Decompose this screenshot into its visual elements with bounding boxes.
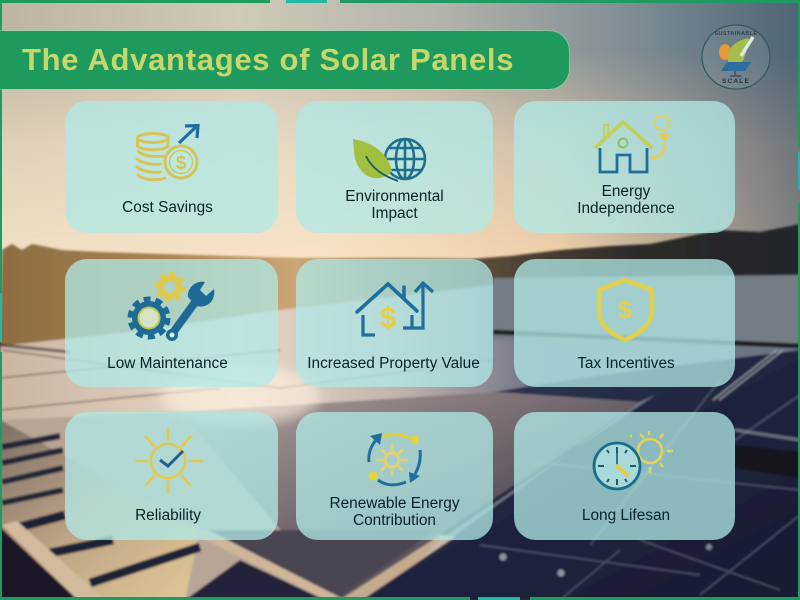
- panel: environmental impact: [296, 101, 493, 233]
- icon: house with plug and bulb: [594, 114, 674, 174]
- label: [329, 495, 460, 528]
- panel: reliability: [65, 412, 278, 540]
- icon: sun with check: [134, 426, 204, 494]
- panel: energy independence: [514, 101, 735, 233]
- logo: Sustainable Scale: SUSTAINABLE: [714, 31, 758, 37]
- panel: renewable energy contribution: [296, 412, 493, 540]
- label: Long Lifesan: [582, 507, 670, 524]
- icon: gears and wrench: [128, 272, 214, 341]
- icon: house with dollar and arrow: $: [380, 302, 397, 335]
- icon: shield with dollar: [596, 278, 654, 342]
- navy panels: [340, 350, 800, 600]
- light panel surface: [0, 285, 800, 600]
- label: Environmental: [345, 188, 444, 205]
- label: Reliability: [135, 507, 201, 524]
- panel: tax incentives: [514, 259, 735, 387]
- icon: sun with cycle arrows: [367, 433, 422, 486]
- panel: long lifespan: [514, 412, 735, 540]
- label: [577, 183, 675, 216]
- label: Contribution: [353, 512, 436, 528]
- icon: clock and sun: [592, 431, 673, 490]
- label: [345, 188, 444, 222]
- purple slanted panel: [180, 392, 640, 600]
- black panel edge: [493, 332, 800, 346]
- icon: leaf and globe: [353, 138, 426, 182]
- lower left frame and stripes: [0, 420, 200, 600]
- label: Increased Property Value: [307, 355, 480, 372]
- icon: shield with dollar: $: [618, 296, 632, 324]
- logo: Sustainable Scale: SCALE: [722, 78, 750, 85]
- label: Renewable Energy: [329, 495, 460, 512]
- label: Independence: [577, 200, 675, 216]
- label: Impact: [371, 204, 418, 222]
- panel: low maintenance: [65, 259, 278, 387]
- icon: coins and arrow: [135, 124, 200, 182]
- label: Energy: [602, 183, 650, 200]
- panel seams: [0, 350, 493, 410]
- label: Cost Savings: [122, 199, 213, 216]
- panel: cost savings: [65, 101, 278, 233]
- label: Low Maintenance: [107, 355, 228, 372]
- panel: increased property value: [296, 259, 493, 387]
- icon: coins and arrow: $: [176, 153, 187, 174]
- tree line and dark band: [0, 224, 800, 345]
- title text: The Advantages of Solar Panels: [22, 42, 514, 77]
- icon: house with dollar and arrow: [355, 280, 434, 337]
- label: Tax Incentives: [577, 355, 675, 372]
- logo: Sustainable Scale: [701, 24, 770, 90]
- title banner: [0, 31, 569, 89]
